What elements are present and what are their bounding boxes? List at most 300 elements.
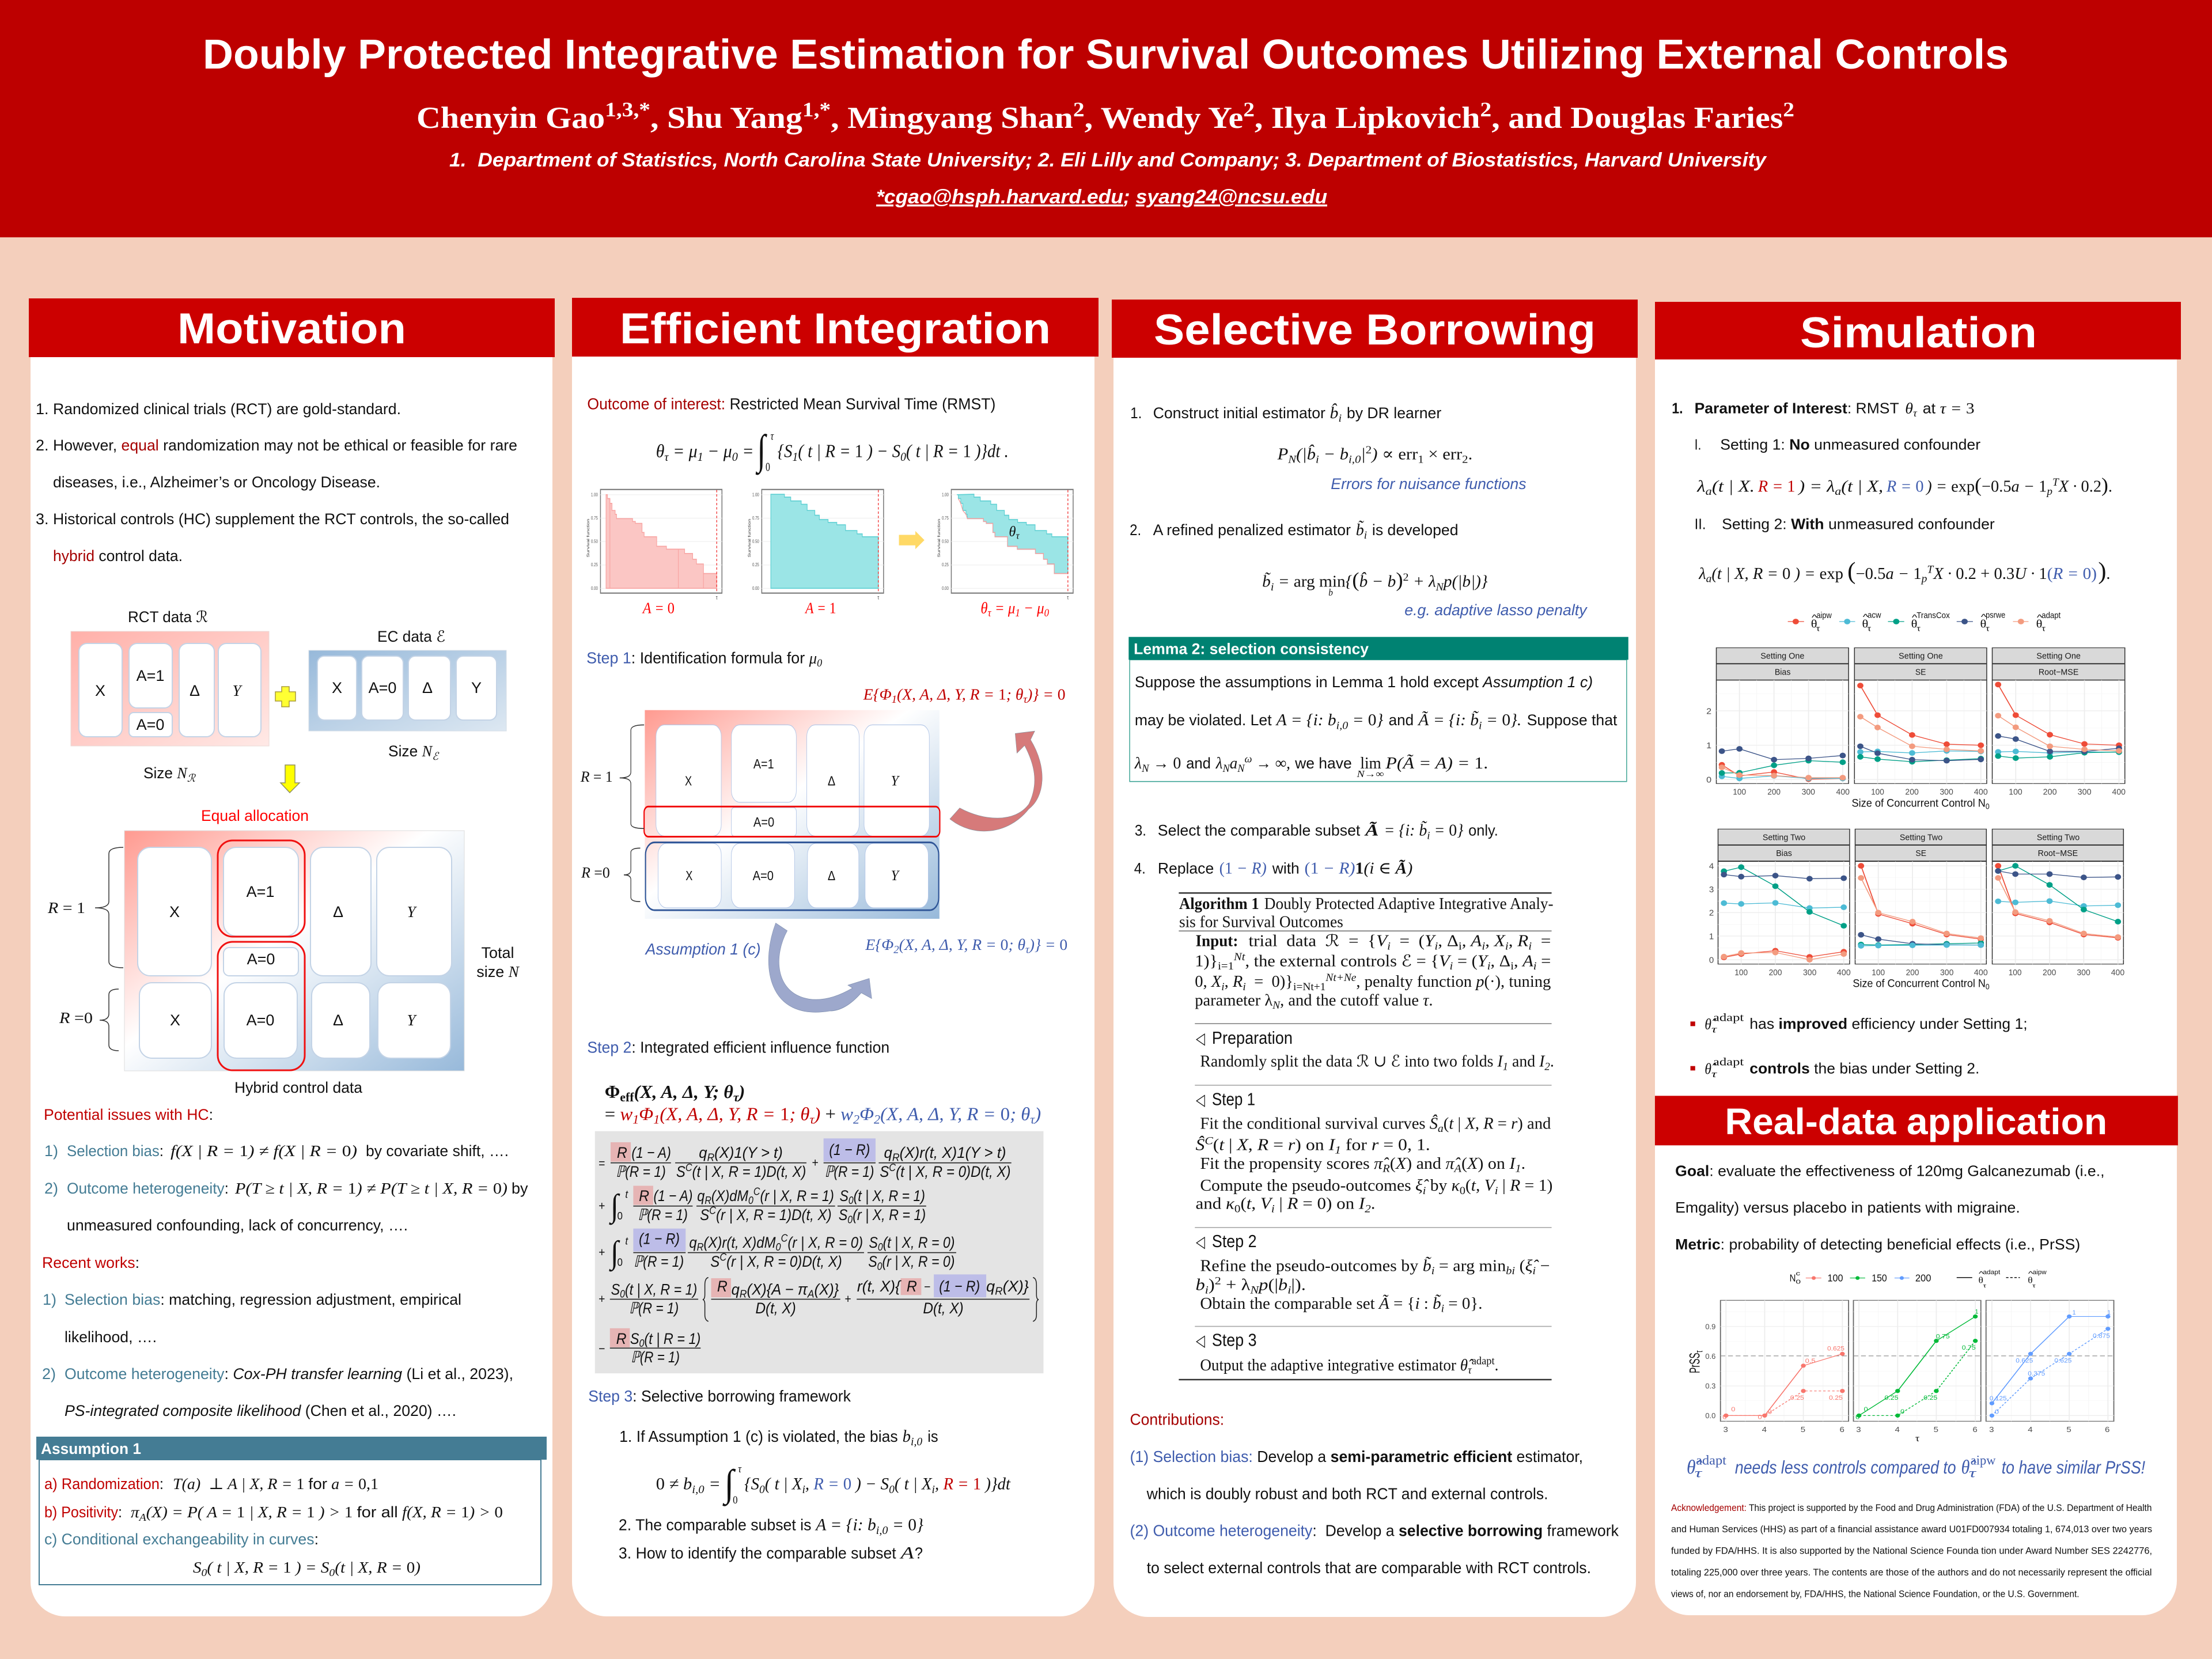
y axis labels: 0.0 — [1705, 1411, 1715, 1420]
callout: lemma 2: may be violated. Let — [1135, 712, 1272, 729]
algorithm box: Doubly Protected Adaptive Integrative Analy- — [1264, 895, 1554, 913]
facet: setting two bias: 4 — [1709, 861, 1714, 871]
chart: RMST difference: τ — [1067, 594, 1069, 601]
algorithm box: Output the adaptive integrative estimator θ̂τadapt . — [1200, 1354, 1498, 1376]
setting 1 — [1695, 436, 2112, 497]
finding: improved efficiency: τ — [1711, 1024, 1718, 1035]
facet: N0c 100: 0 — [1731, 1406, 1736, 1413]
formula box: efficient influence function: S0(t | X, R = 1) — [611, 1280, 697, 1300]
heading: simulation: Simulation — [1800, 308, 2037, 357]
item 1 — [1130, 403, 1527, 493]
facet: setting one bias: 200 — [1767, 787, 1781, 797]
text block: potential issues: Selection bias: — [67, 1142, 164, 1160]
diagram: RCT data block: RCT data ℛ — [128, 608, 208, 626]
algorithm box: ◁ — [1196, 1029, 1205, 1048]
facet: N0c 150: 0 — [1864, 1406, 1868, 1413]
equation: phi 2: E{Φ 2(X, A, Δ, Y, R = 0; θ τ)} = 0 — [865, 937, 1067, 956]
legend: τ — [1986, 625, 1990, 633]
callout: assumption 1 — [36, 1437, 547, 1585]
motivation intro list: Randomized clinical trials (RCT) are gold-standard. — [53, 400, 401, 418]
formula box: efficient influence function: S0(t | X, R = 1) — [840, 1187, 925, 1207]
conclusion sentence: needs less controls compared to — [1735, 1457, 1956, 1478]
diagram: step 1 data blocks: X — [685, 774, 692, 789]
header banner — [0, 0, 2212, 237]
motivation intro list: hybrid control data. — [53, 547, 183, 565]
callout: lemma 2: and — [1389, 712, 1414, 729]
facet: setting two root-MSE: 300 — [2077, 967, 2090, 977]
x axis labels: 4 — [2028, 1425, 2033, 1434]
facet: setting two SE: 100 — [1872, 967, 1885, 977]
contributions: to select external controls that are comparable with RCT controls. — [1147, 1559, 1591, 1577]
step 3 list: 0 ≠ bi,0 = — [656, 1475, 721, 1496]
setting 2: (R = 0) — [2047, 565, 2097, 582]
formula box: efficient influence function: R — [907, 1277, 917, 1295]
item 2: b — [1328, 588, 1333, 598]
algorithm box: trial data ℛ = { V i = ( Y i, Δ i, A i, X i, R i = — [1249, 933, 1551, 952]
chart: RMST difference: 0.00 — [942, 585, 949, 591]
diagram: RCT data block: X — [95, 682, 105, 699]
legend: 150 — [1872, 1272, 1887, 1283]
formula box: efficient influence function: + — [599, 1293, 605, 1306]
diagram: RCT data block: A=1 — [137, 667, 164, 684]
step 3 list: bi,0 — [903, 1427, 923, 1448]
arrow: blue curved arrow — [768, 923, 872, 1012]
facet: setting two bias: 200 — [1769, 967, 1782, 977]
algorithm box: Refine the pseudo-outcomes by b̃i = arg min bi (ξ̂i − — [1200, 1256, 1550, 1277]
facet: N0c 100: 0.5 — [1805, 1358, 1816, 1365]
chart: survival curve A=0 — [586, 490, 722, 601]
legend: τ — [1867, 625, 1871, 633]
text block: potential issues: unmeasured confounding, lack of concurrency, …. — [67, 1217, 408, 1234]
facet: setting one bias: 1 — [1706, 741, 1711, 750]
diagram: step 1 data blocks: Y — [891, 868, 900, 884]
diagram: step 1 data blocks: Δ — [828, 869, 835, 884]
formula box: efficient influence function: − — [924, 1281, 931, 1294]
item 1: 1. — [1130, 405, 1142, 422]
facet: N0c 100: 0 — [1768, 1408, 1772, 1416]
algorithm box: Step 1 — [1212, 1089, 1255, 1109]
finding: controls bias: τ — [1711, 1069, 1718, 1080]
label: equal allocation: Equal allocation — [201, 807, 309, 824]
facet: setting two root-MSE: Root−MSE — [2038, 849, 2078, 858]
facet: setting two bias: 1 — [1709, 931, 1714, 941]
text block: potential issues: P(T ≥ t | X, R = 1) ≠ P(T ≥ t | X, R = 0) — [234, 1180, 507, 1197]
chart: setting two: Size of Concurrent Control N0 — [1853, 977, 1990, 991]
algorithm box: Preparation — [1212, 1028, 1293, 1048]
facet: setting one root-MSE: Root−MSE — [2039, 667, 2078, 677]
facet: N0c 200: 0.625 — [2016, 1357, 2033, 1365]
diagram: step 1 data blocks: R =0 — [581, 865, 610, 882]
callout: lemma 2: lim — [1360, 754, 1381, 772]
setting 1: ) = exp(−0.5a − 1pTX · 0.2). — [1926, 474, 2112, 497]
chart: RMST difference: Survival function — [937, 519, 941, 557]
formula box: efficient influence function: R — [717, 1277, 728, 1295]
diagram: step 1 data blocks — [580, 710, 940, 919]
contributions: (1) Selection bias: Develop a semi-parametric efficient estimator, — [1130, 1448, 1583, 1466]
text block: potential issues: f(X | R = 1) ≠ f(X | R = 0) — [171, 1142, 357, 1160]
facet: setting two SE: 300 — [1940, 967, 1954, 977]
step 3 list: ∫ — [722, 1461, 736, 1507]
formula box: efficient influence function: D(t, X) — [923, 1299, 964, 1317]
label: A=0: A = 0 — [642, 600, 675, 617]
algorithm box: ◁ — [1196, 1331, 1205, 1350]
motivation intro list: 2. — [36, 437, 49, 454]
facet: setting one root-MSE: 200 — [2043, 787, 2057, 797]
setting 2 — [1695, 516, 2110, 585]
formula box: efficient influence function: = — [599, 1157, 605, 1171]
legend: θ — [1980, 618, 1986, 630]
panel: efficient integration — [572, 298, 1099, 1616]
step 1 heading: Step 1 : Identification formula for μ0 — [586, 650, 822, 669]
conclusion sentence: adapt — [1696, 1453, 1726, 1468]
motivation intro list: 3. — [36, 510, 49, 528]
goal and metric — [1675, 1162, 2105, 1253]
outcome of interest line: Outcome of interest: Restricted Mean Survival Time (RMST) — [587, 395, 995, 413]
item 4: (1 − R) — [1219, 859, 1267, 877]
setting 1: ) = λa(t | X, — [1798, 477, 1883, 497]
authors: Chenyin Gao 1,3,*, Shu Yang 1,*, Mingyang Shan 2, Wendy Ye 2, Ilya Lipkovich 2, and Douglas Faries 2 — [416, 98, 1794, 135]
facet: setting one bias: 0 — [1706, 775, 1711, 785]
callout: lemma 2: and — [1186, 755, 1211, 772]
chart: survival curve A=0: 0.75 — [591, 515, 598, 521]
selective borrowing upper content — [1128, 403, 1628, 877]
y axis labels: 0.9 — [1705, 1323, 1715, 1331]
facet: setting two bias: 400 — [1837, 967, 1851, 977]
formula box: efficient influence function: 0 — [618, 1210, 623, 1222]
facet: N0c 200: 0.625 — [2054, 1357, 2071, 1365]
emails: *cgao@hsph.harvard.edu ; syang24@ncsu.edu — [876, 186, 1327, 208]
x axis labels: 3 — [1989, 1425, 1994, 1434]
facet: setting two SE: 200 — [1906, 967, 1919, 977]
legend: θ — [1911, 618, 1917, 630]
panel: motivation — [29, 298, 555, 1616]
x axis labels: τ — [1915, 1434, 1920, 1443]
diagram: step 1 data blocks: Δ — [828, 774, 835, 789]
algorithm box: Step 3 — [1212, 1330, 1256, 1350]
conclusion sentence: τ — [1695, 1466, 1703, 1480]
x axis labels: 5 — [2066, 1425, 2071, 1434]
formula box: efficient influence function: (1 − A) — [631, 1143, 671, 1161]
legend: TransCox — [1916, 611, 1950, 620]
chart: RMST difference: 0.25 — [942, 562, 949, 567]
arrow: yellow down arrow — [281, 765, 300, 793]
heading: real-data application — [1655, 1096, 2178, 1145]
setting 2: II. — [1695, 516, 1706, 532]
step 2 heading: Step 2: Integrated efficient influence function — [587, 1039, 889, 1056]
formula box: efficient influence function: ∫ — [609, 1187, 620, 1225]
formula box: efficient influence function: + — [844, 1293, 851, 1306]
simulation settings: τ = 3 — [1940, 400, 1975, 417]
highlights — [610, 1138, 986, 1347]
contributions: Contributions: — [1130, 1411, 1224, 1429]
formula box: efficient influence function: SC(r | X, R = 0)D(t, X) — [710, 1251, 842, 1270]
item 2: b̃i — [1356, 520, 1367, 541]
legend: τ — [1816, 625, 1820, 633]
item 4: Replace — [1158, 861, 1214, 877]
facet: setting two bias: Bias — [1776, 849, 1792, 858]
diagram: EC data block: EC data ℰ — [377, 628, 445, 645]
diagram: hybrid control data: X — [169, 903, 180, 921]
formula box: efficient influence function: (1 − R) — [639, 1229, 680, 1248]
algorithm box: ◁ — [1196, 1232, 1205, 1251]
panel: simulation and real-data application — [1655, 302, 2181, 1615]
formula box: efficient influence function: SC(t | X, R = 1)D(t, X) — [676, 1161, 806, 1181]
motivation intro list: However, equal randomization may not be ethical or feasible for rare — [53, 437, 517, 454]
legend: τ — [1916, 625, 1921, 633]
title: Doubly Protected Integrative Estimation for Survival Outcomes Utilizing External Controls — [203, 32, 2009, 78]
diagram: RCT data block — [71, 608, 269, 783]
chart: setting one: Size of Concurrent Control N0 — [1852, 797, 1990, 811]
facet: N0c 200: 0.125 — [1990, 1395, 2007, 1402]
text block: recent works: Selection bias: matching, regression adjustment, empirical — [65, 1291, 461, 1308]
legend: 100 — [1828, 1272, 1843, 1283]
legend: τ — [2041, 625, 2046, 633]
finding: controls bias: controls the bias under Setting 2. — [1749, 1060, 1979, 1077]
facet: setting two root-MSE: Setting Two — [2037, 832, 2080, 842]
heading: efficient integration: Efficient Integration — [620, 304, 1051, 353]
legend: ^ — [1979, 1270, 1984, 1278]
facet: N0c 150 — [1854, 1300, 1981, 1421]
facet: setting two root-MSE: 400 — [2111, 967, 2124, 977]
setting 1: R = 0 — [1886, 477, 1924, 495]
facet: N0c 200: 0 — [1995, 1408, 1999, 1416]
RMST formula: θτ = μ 1 − μ 0 = — [656, 441, 753, 464]
formula box: efficient influence function: qR(X)} — [986, 1277, 1029, 1297]
step 3 list: A — [899, 1544, 915, 1563]
formula box: efficient influence function: 0 — [618, 1256, 623, 1268]
simulation settings — [1672, 400, 2112, 585]
callout: assumption 1: Assumption 1 — [41, 1440, 141, 1457]
algorithm box: Fit the conditional survival curves Ŝa(t | X, R = r) and — [1200, 1114, 1551, 1135]
finding: controls bias: θ̂ — [1705, 1061, 1717, 1077]
callout: lemma 2: P(Ã = A) = 1. — [1385, 754, 1488, 772]
facet: setting two SE: Setting Two — [1900, 832, 1942, 842]
item 3: Select the comparable subset — [1158, 822, 1360, 839]
diagram: hybrid control data: R = 1 — [47, 899, 85, 916]
legend: c — [1796, 1270, 1801, 1277]
callout: lemma 2: Ã = {i: b̃ i = 0}. — [1417, 711, 1521, 732]
callout: lemma 2: λNaNω → ∞, — [1215, 752, 1290, 775]
diagram: EC data block: Δ — [422, 679, 433, 696]
legend — [1788, 611, 2061, 633]
item 1: PN(|b̂i − b i,0|2) ∝ err 1 × err 2. — [1277, 444, 1472, 466]
x axis labels: 6 — [2105, 1425, 2109, 1434]
facet: setting one root-MSE — [1993, 648, 2126, 797]
RMST formula: 0 — [766, 460, 770, 474]
callout: lemma 2: Suppose the assumptions in Lemma 1 hold except Assumption 1 c) — [1135, 674, 1593, 691]
formula box: efficient influence function: S0(t | X, R = 0) — [869, 1233, 955, 1253]
facet: N0c 100: 0 — [1722, 1414, 1727, 1421]
callout: lemma 2: λN → 0 — [1134, 754, 1181, 775]
step 3 list: 2. The comparable subset is — [619, 1516, 811, 1534]
facet: setting two bias: 3 — [1709, 885, 1714, 894]
RMST formula: τ — [771, 429, 774, 443]
legend: τ — [2032, 1282, 2036, 1289]
algorithm box: 1)} i=1 Nt, the external controls ℰ = { V i = ( Yi, Δ i, A i = — [1195, 950, 1551, 972]
item 2: 2. — [1130, 522, 1141, 539]
chart: setting one — [1706, 648, 2126, 811]
real-data chart and notes — [1671, 1269, 2152, 1599]
equation: weighted sum: = w1Φ1(X, A, Δ, Y, R = 1; θτ) + w2Φ2(X, A, Δ, Y, R = 0; θτ) — [605, 1104, 1041, 1127]
chart: survival curve A=0: τ — [716, 594, 718, 601]
item 4: (1 − R)1(i ∈ Ã) — [1305, 859, 1412, 877]
diagram: hybrid control data: X — [170, 1012, 180, 1029]
diagram: RCT data block: Y — [232, 682, 243, 699]
algorithm box: sis for Survival Outcomes — [1179, 914, 1343, 931]
diagram: hybrid control data: R =0 — [59, 1009, 93, 1027]
diagram: EC data block: A=0 — [369, 679, 396, 696]
simulation settings: θτ — [1905, 400, 1918, 419]
item 3 — [1135, 821, 1498, 842]
x axis labels: 5 — [1934, 1425, 1938, 1434]
item 2 — [1130, 520, 1588, 619]
facet: setting one SE: 400 — [1974, 787, 1988, 797]
facet: setting one root-MSE: Setting One — [2036, 651, 2081, 661]
facet: N0c 100: 0.625 — [1827, 1345, 1844, 1353]
icon: yellow plus — [275, 687, 296, 707]
diagram: step 1 data blocks: A=0 — [753, 869, 774, 884]
diagram: RCT data block: A=0 — [137, 716, 164, 733]
facet: setting one SE: Setting One — [1899, 651, 1943, 661]
chart: survival curve A=1: 1.00 — [752, 491, 759, 498]
diagram: EC data block: X — [332, 679, 342, 696]
formula box: efficient influence function: qR(X)1(Y > t) — [699, 1143, 783, 1164]
facet: setting two bias — [1709, 829, 1851, 977]
diagram: hybrid control data: A=0 — [247, 950, 275, 968]
text block: potential issues: 2) — [44, 1180, 58, 1197]
facet: setting two SE — [1855, 829, 1988, 977]
motivation intro list: diseases, i.e., Alzheimer’s or Oncology Disease. — [53, 474, 380, 491]
item 4 — [1134, 859, 1412, 877]
setting 1: λa(t | X. — [1696, 477, 1755, 497]
algorithm box — [1179, 892, 1554, 1380]
callout: lemma 2: A = {i: b i,0 = 0} — [1275, 711, 1383, 732]
legend: ^ — [2028, 1270, 2033, 1278]
x axis labels: 3 — [1856, 1425, 1861, 1434]
chart: RMST difference: 0.75 — [942, 515, 949, 521]
facet: N0c 150: 1 — [1975, 1308, 1979, 1316]
formula box: efficient influence function: qR(X){A − πA(X)} — [732, 1280, 839, 1300]
formula box: efficient influence function: (1 − R) — [939, 1277, 980, 1295]
item 4: 4. — [1134, 861, 1146, 877]
contributions: (2) Outcome heterogeneity : Develop a selective borrowing framework — [1130, 1522, 1619, 1540]
simulation findings and real-data intro — [1655, 1012, 2178, 1253]
diagram: RCT data block: Δ — [190, 682, 200, 699]
y axis labels: 0.6 — [1705, 1352, 1715, 1361]
diagram: hybrid control data: A=1 — [247, 883, 274, 900]
algorithm box: Fit the propensity scores π̂R(X) and π̂A(X) on I1. — [1200, 1155, 1525, 1175]
step 3 list: ? — [915, 1544, 923, 1562]
callout: assumption 1: c) Conditional exchangeability in curves: — [44, 1531, 319, 1548]
text block: recent works: Outcome heterogeneity: Cox-PH transfer learning (Li et al., 2023), — [65, 1365, 513, 1382]
algorithm box: Step 2 — [1212, 1232, 1256, 1251]
label: assumption 1 (c): Assumption 1 (c) — [644, 941, 761, 959]
diagram: step 1 data blocks: R = 1 — [580, 768, 613, 786]
chart: survival curve A=1: 0.75 — [752, 515, 759, 521]
facet: setting two root-MSE — [1993, 829, 2124, 977]
parameter of interest: 1. — [1672, 400, 1683, 416]
equation: phi eff: Φeff(X, A, Δ, Y; θ τ) — [605, 1082, 745, 1105]
simulation settings: at — [1923, 400, 1936, 416]
formula box: efficient influence function: R — [639, 1187, 649, 1205]
callout: assumption 1: b) Positivity: — [44, 1503, 122, 1521]
item 2: is developed — [1372, 522, 1459, 539]
item 2: b̃i = arg min{(b̂ − b)2 + λNp(|b|)} — [1262, 569, 1488, 593]
conclusion sentence: aipw — [1971, 1453, 1996, 1468]
formula box: efficient influence function: r(t, X){ — [857, 1277, 902, 1295]
text block: potential issues: Outcome heterogeneity: — [67, 1180, 229, 1197]
formula box: efficient influence function: S0(t | R = 1) — [630, 1330, 700, 1350]
legend: ^ — [1981, 612, 1987, 622]
item 2: e.g. adaptive lasso penalty — [1404, 602, 1588, 619]
formula box: efficient influence function: ℙ(R = 1) — [634, 1252, 684, 1270]
y axis labels — [1687, 1323, 1715, 1420]
legend: aipw — [2033, 1269, 2047, 1276]
conclusion sentence: τ — [1969, 1466, 1977, 1480]
formula box: efficient influence function — [595, 1131, 1043, 1373]
finding: improved efficiency — [1691, 1012, 2028, 1035]
item 3: = {i: b̃i = 0} — [1384, 821, 1463, 842]
diagram: EC data block: Y — [471, 679, 482, 696]
facet: N0c 100: 0.25 — [1790, 1395, 1804, 1402]
legend: ^ — [2037, 612, 2043, 622]
legend: aipw — [1816, 611, 1832, 620]
legend — [1790, 1269, 2047, 1289]
facet: setting two bias: 100 — [1734, 967, 1748, 977]
RMST formula — [656, 426, 1009, 476]
facet: setting two bias: 2 — [1709, 908, 1714, 918]
finding: improved efficiency: adapt — [1713, 1012, 1744, 1024]
legend: θ — [1979, 1275, 1983, 1286]
legend: 200 — [1915, 1272, 1931, 1283]
text block: potential issues: Potential issues with HC: — [44, 1106, 213, 1123]
finding: controls bias — [1691, 1056, 1979, 1080]
contributions — [1130, 1411, 1619, 1577]
conclusion sentence: θ̂ — [1687, 1456, 1703, 1478]
chart: survival curve A=0: Survival function — [586, 519, 590, 557]
facet: N0c 200: 0.875 — [2093, 1332, 2110, 1340]
formula box: efficient influence function: SC(r | X, R = 1)D(t, X) — [700, 1205, 832, 1224]
chart: PrSS — [1687, 1300, 2114, 1443]
item 3: Ã — [1364, 821, 1379, 839]
text block: potential issues: 1) — [44, 1142, 58, 1160]
setting 2: λa(t | X, R = 0 ) = exp (−0.5a − 1pTX · 0.2 + 0.3U · 1 — [1699, 558, 2047, 585]
algorithm box: Compute the pseudo-outcomes ξ̂i by κ0(t, Vi | R = 1) — [1200, 1177, 1552, 1196]
formula box: efficient influence function: (1 − A) — [654, 1187, 692, 1205]
formula box: efficient influence function: ℙ(R = 1) — [631, 1348, 680, 1366]
algorithm box: ŜC(t | X, R = r) on I1 for r = 0, 1. — [1195, 1134, 1430, 1156]
heading: selective borrowing: Selective Borrowing — [1154, 305, 1596, 354]
step 2 and step 3 content — [587, 1039, 1043, 1563]
diagram: RCT data block: Size Nℛ — [143, 764, 196, 783]
item 1: b̂i — [1330, 403, 1342, 425]
facet: N0c 150: 0 — [1855, 1414, 1859, 1421]
callout: assumption 1: S0( t | X, R = 1 ) = S 0(t | X, R = 0) — [193, 1559, 421, 1578]
facet: setting one root-MSE: 400 — [2112, 787, 2126, 797]
legend: adapt — [2041, 611, 2061, 620]
contributions: which is doubly robust and both RCT and external controls. — [1146, 1486, 1548, 1503]
RMST formula: {S1( t | R = 1 ) − S 0( t | R = 1 )}dt . — [778, 441, 1009, 464]
facet: setting one bias: 300 — [1802, 787, 1815, 797]
legend: τ — [1983, 1282, 1986, 1289]
chart: RMST difference: 0.50 — [942, 539, 949, 544]
legend: ^ — [1912, 612, 1918, 622]
facet: setting two bias: 300 — [1803, 967, 1817, 977]
facet: setting one SE: 300 — [1940, 787, 1953, 797]
facet: N0c 150: 0.75 — [1962, 1344, 1976, 1351]
chart: RMST difference — [937, 490, 1073, 601]
x axis labels: 3 — [1724, 1425, 1728, 1434]
